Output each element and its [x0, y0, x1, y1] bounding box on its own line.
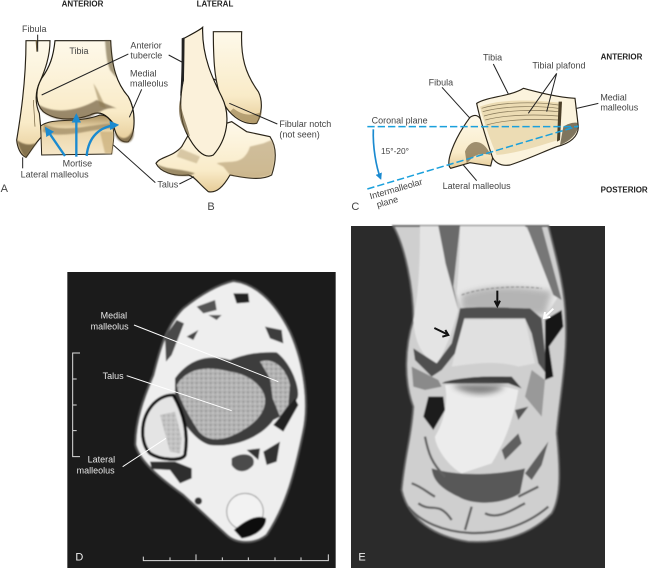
joint shading A [17, 41, 134, 157]
panel A: anterior ankle illustration: (not seen) [279, 130, 320, 140]
lateral malleolus label D: Lateral [88, 455, 115, 465]
panel D: axial MRI: malleolus [91, 322, 129, 332]
panel letter B: B [207, 201, 215, 213]
fibula bone C [449, 115, 493, 168]
tibial plafond label: Tibial plafond [532, 60, 585, 70]
tibia bone B [213, 32, 261, 124]
panel letter A: A [1, 183, 9, 195]
intermalleolar plane label: Intermalleolar [368, 177, 424, 201]
fibula label C: Fibula [429, 77, 453, 87]
panel A: anterior ankle illustration: tubercle [130, 51, 162, 61]
heading: posterior: POSTERIOR [601, 186, 648, 195]
angle arrow [373, 129, 381, 179]
medial malleolus label D: Medial [101, 310, 127, 320]
vertical scale bar [73, 353, 80, 457]
MRI background D [67, 272, 336, 568]
subtalar joint [442, 376, 522, 388]
plafond surface C [480, 101, 559, 155]
talus shading B [157, 140, 275, 178]
panel letter E: E [358, 552, 366, 564]
fibula bone A [17, 41, 50, 157]
dark medial recess [545, 310, 563, 380]
fibula E [413, 226, 458, 363]
medial malleolus label: Medial [130, 68, 156, 78]
arrow: fibular black [434, 328, 448, 337]
mortise label: Mortise [63, 159, 92, 169]
arrow: medial white [544, 309, 553, 318]
fibula label: Fibula [22, 24, 46, 34]
talus with cartilage [175, 352, 298, 446]
talus label D: Talus [103, 371, 124, 381]
panel A: anterior ankle illustration [1, 0, 331, 213]
talus E [452, 319, 535, 367]
talus bone B [156, 122, 275, 192]
lateral malleolus [143, 395, 186, 459]
dark tendons and vessels [150, 462, 192, 483]
talus label: Talus [157, 179, 179, 189]
panel D: axial MRI [67, 272, 336, 568]
panel letter D: D [75, 551, 83, 563]
fibular notch label: Fibular notch [279, 119, 331, 129]
MRI anatomy E [393, 226, 566, 542]
lateral tendons [423, 397, 445, 430]
coronal plane label: Coronal plane [372, 115, 428, 125]
talus bone A [41, 115, 114, 155]
panel C: plafond view illustration [351, 52, 648, 213]
mortise joint cartilage [413, 307, 548, 377]
intermalleolar plane label: plane [375, 194, 399, 210]
panel E: coronal MRI [351, 226, 605, 568]
achilles tendon [227, 493, 263, 530]
calcaneus [435, 384, 518, 473]
panel D: axial MRI: malleolus [77, 465, 115, 475]
panel letter C: C [351, 201, 359, 213]
heel fat septa [408, 437, 548, 533]
angle label: 15°-20° [381, 146, 409, 156]
mortise arrows [46, 115, 117, 157]
medial malleolus label C: Medial [600, 92, 627, 102]
tibia label C: Tibia [483, 52, 502, 62]
horizontal scale bar [143, 554, 328, 561]
tibia label: Tibia [69, 46, 88, 56]
MRI background E [351, 226, 605, 568]
anterior tuberculum label: Anterior [130, 41, 162, 51]
tibia E [457, 226, 558, 317]
plane lines [367, 126, 578, 189]
MRI anatomy D [135, 281, 306, 542]
fibula bone B [181, 27, 227, 156]
panel A: anterior ankle illustration: malleolus [130, 79, 168, 89]
tibia bone A [37, 41, 134, 142]
lateral malleolus label: Lateral malleolus [21, 170, 89, 180]
arrow: plafond black [495, 291, 500, 306]
tibia bone C [477, 88, 578, 165]
panel C: plafond view illustration: malleolus [600, 103, 639, 113]
intermalleolar plane label [368, 177, 426, 211]
plantar muscle [432, 468, 525, 503]
heading: anterior C: ANTERIOR [601, 52, 643, 61]
lateral malleolus label C: Lateral malleolus [443, 181, 511, 191]
